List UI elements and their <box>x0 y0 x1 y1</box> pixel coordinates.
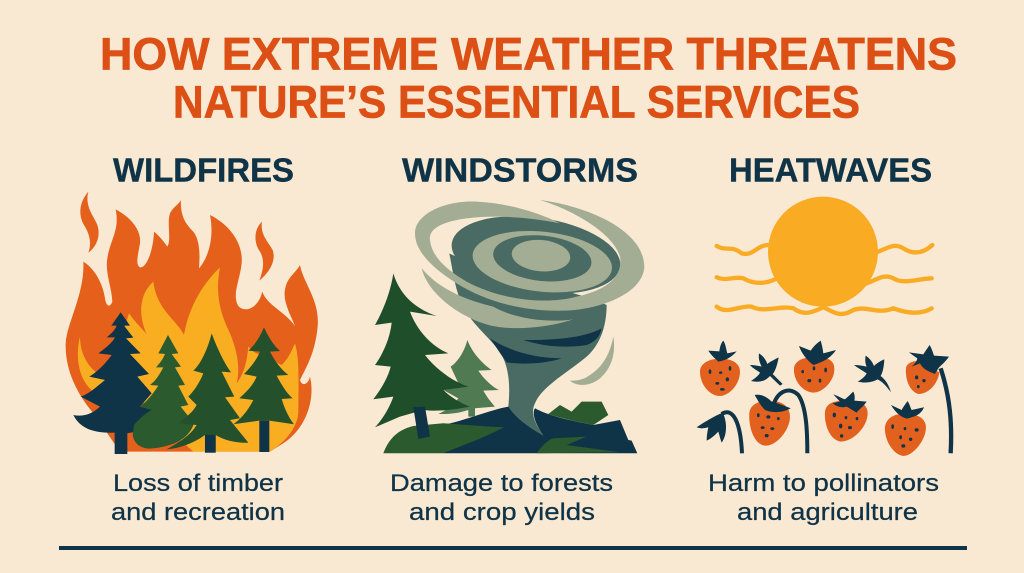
seeds 5 <box>915 375 926 388</box>
funnel ring dark <box>491 231 594 286</box>
strawberry 5 <box>906 361 939 394</box>
tree: dark green centre <box>167 333 248 453</box>
tree: navy <box>73 312 153 454</box>
outer swirl light <box>415 200 644 311</box>
tree: dark green <box>373 273 470 427</box>
seeds 4 <box>833 413 858 438</box>
trunk: right <box>259 421 269 452</box>
stem 5 <box>941 368 951 453</box>
leaves 4 <box>833 392 867 413</box>
trunk <box>413 407 430 439</box>
caption: wildfires: Loss of timber <box>113 470 283 497</box>
caption: heatwaves <box>708 470 939 526</box>
caption: heatwaves: Harm to pollinators <box>708 470 939 497</box>
panel: wildfires <box>66 152 318 526</box>
navy bands <box>523 328 602 347</box>
strawberry 2 <box>794 357 834 393</box>
ground green lower <box>537 437 620 453</box>
flame tongue left <box>78 337 107 392</box>
caption: windstorms <box>390 470 613 526</box>
strawberry 1 <box>700 359 740 396</box>
panel: heatwaves <box>697 152 951 526</box>
icon: burning forest <box>66 192 318 454</box>
leaves 5 <box>909 345 949 374</box>
lower swirl band <box>422 268 573 328</box>
caption: windstorms: Damage to forests <box>390 470 613 497</box>
icon: tornado over forest <box>373 200 644 453</box>
seeds 1 <box>709 366 731 391</box>
funnel ring light <box>470 225 615 299</box>
heading: heatwaves: HEATWAVES <box>729 152 932 188</box>
leaves 1 <box>708 341 737 362</box>
leaves 3 <box>755 395 791 412</box>
swirl centre <box>510 237 572 274</box>
tree: light green <box>438 340 499 417</box>
drooping leaf and stem <box>697 412 742 453</box>
title <box>100 28 957 128</box>
caption: heatwaves: and agriculture <box>737 499 918 526</box>
seeds 3 <box>757 413 780 437</box>
flames inner <box>117 267 299 452</box>
seeds 2 <box>801 366 827 383</box>
caption: windstorms: and crop yields <box>409 499 595 526</box>
caption: wildfires: and recreation <box>111 499 285 526</box>
strawberry 6 <box>885 414 926 456</box>
detached leaf right <box>854 356 891 392</box>
detached leaf left <box>750 353 783 386</box>
heat waves <box>717 245 932 314</box>
flames outer <box>66 200 318 452</box>
wind wisp <box>570 337 614 385</box>
ground navy <box>443 407 637 453</box>
rock green <box>548 402 608 425</box>
trunk: navy <box>205 435 216 453</box>
title: NATURE’S ESSENTIAL SERVICES <box>173 76 860 128</box>
flame wisp right <box>255 222 274 281</box>
panel: windstorms <box>373 152 644 526</box>
strawberry 3 <box>749 401 790 446</box>
stem 3 <box>773 391 807 453</box>
flame wisp left <box>80 192 99 253</box>
heading: windstorms: WINDSTORMS <box>402 152 638 188</box>
seeds 6 <box>891 424 919 448</box>
funnel body <box>449 253 607 436</box>
bottom rule <box>59 546 967 550</box>
tree: mid green <box>133 335 194 449</box>
leaves 6 <box>891 401 924 419</box>
tree: green right <box>233 327 294 424</box>
title: HOW EXTREME WEATHER THREATENS <box>100 28 957 80</box>
sun <box>768 197 878 307</box>
strawberry 4 <box>825 401 868 442</box>
leaves 2 <box>799 341 836 365</box>
icon: sun and strawberries <box>697 197 951 456</box>
funnel top outer ring <box>447 206 625 304</box>
ground green left <box>383 423 504 453</box>
caption: wildfires <box>111 470 285 526</box>
heading: wildfires: WILDFIRES <box>113 152 294 188</box>
